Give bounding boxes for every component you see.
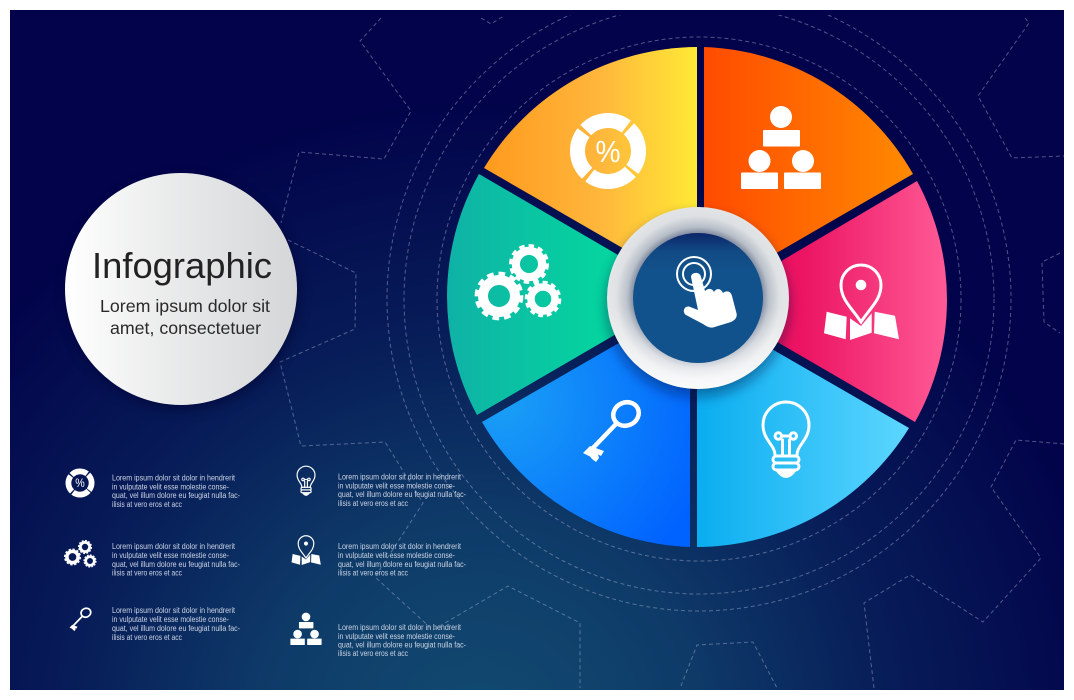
segment: pink map <box>710 181 947 422</box>
icon: map pin <box>824 265 899 340</box>
list item: map pin: in vulputate velit esse molestie conse- <box>338 551 455 560</box>
list item: hierarchy: in vulputate velit esse molestie conse- <box>338 632 455 641</box>
list item: bulb: Lorem ipsum dolor sit dolor in hendrerit <box>338 472 462 482</box>
icon: light bulb <box>763 402 809 476</box>
heading: Infographic <box>92 245 272 286</box>
list item: hierarchy: ilisis at vero eros et acc <box>338 649 408 658</box>
icon: hierarchy <box>741 106 821 189</box>
list item: percent <box>64 467 240 509</box>
list item: gears: ilisis at vero eros et acc <box>112 568 182 578</box>
list item: key: in vulputate velit esse molestie conse- <box>112 615 229 624</box>
list item: key: quat, vel illum dolore eu feugiat nulla fac- <box>112 624 240 633</box>
list item: percent: ilisis at vero eros et acc <box>112 500 182 509</box>
list item: key <box>70 606 240 642</box>
icon: tapping hand <box>677 257 737 328</box>
list item: key: Lorem ipsum dolor sit dolor in hendrerit <box>112 606 236 615</box>
centre button <box>606 207 790 397</box>
list item: hierarchy: quat, vel illum dolore eu feugiat nulla fac- <box>338 640 466 650</box>
list item: hierarchy <box>290 613 466 658</box>
list item: gears: quat, vel illum dolore eu feugiat nulla fac- <box>112 560 240 569</box>
segment: blue key <box>482 302 690 547</box>
icon: key <box>583 398 643 462</box>
list item: gears <box>65 540 240 578</box>
title circle <box>65 173 299 410</box>
list item: map pin: ilisis at vero eros et acc <box>338 568 408 578</box>
list item: key: ilisis at vero eros et acc <box>112 633 182 642</box>
icon: percent ring <box>565 108 651 194</box>
list item: bulb: ilisis at vero eros et acc <box>338 499 408 508</box>
icon: gears <box>476 246 560 318</box>
list item: map pin: quat, vel illum dolore eu feugiat nulla fac- <box>338 560 466 569</box>
icon: percent ring: % <box>596 134 620 169</box>
list item: bulb: quat, vel illum dolore eu feugiat nulla fac- <box>338 490 466 499</box>
list item: map pin <box>292 536 466 578</box>
list item: percent: Lorem ipsum dolor sit dolor in hendrerit <box>112 474 236 482</box>
list item: bulb <box>297 466 466 508</box>
list item: gears: in vulputate velit esse molestie conse- <box>112 551 229 560</box>
list item: map pin: Lorem ipsum dolor sit dolor in hendrerit <box>338 542 462 551</box>
chart: six segment wheel <box>447 47 947 547</box>
segment: yellow percent <box>484 47 697 291</box>
subheading: Lorem ipsum dolor sit <box>100 296 270 316</box>
list item: percent: % <box>75 476 85 490</box>
segment: orange hierarchy <box>704 47 913 295</box>
segment: light blue bulb <box>697 306 909 547</box>
list item: bulb: in vulputate velit esse molestie conse- <box>338 482 455 490</box>
list item: percent: in vulputate velit esse molestie conse- <box>112 482 229 492</box>
title circle: amet, consectetuer <box>110 318 261 338</box>
list item: hierarchy: Lorem ipsum dolor sit dolor in hendrerit <box>338 623 462 632</box>
list item: gears: Lorem ipsum dolor sit dolor in hendrerit <box>112 542 236 551</box>
list item: percent: quat, vel illum dolore eu feugiat nulla fac- <box>112 491 240 500</box>
segment: green gears <box>447 174 685 415</box>
